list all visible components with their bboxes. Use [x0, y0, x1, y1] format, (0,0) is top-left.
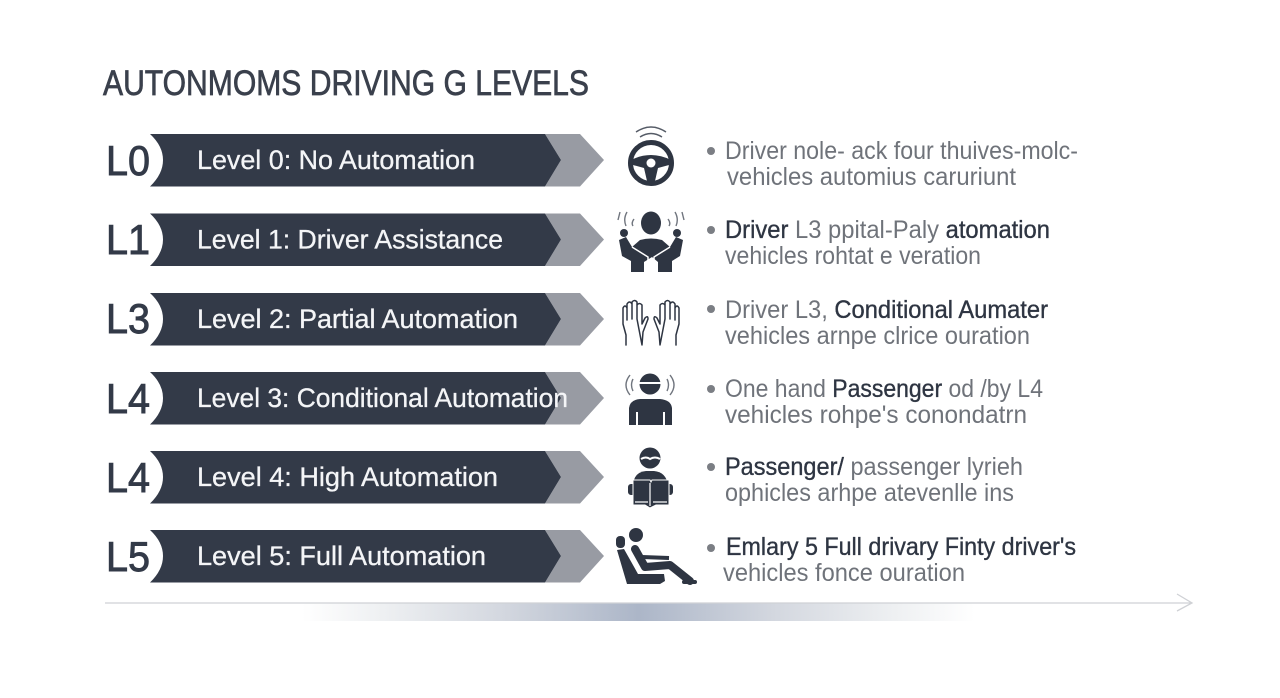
title: AUTONMOMS DRIVING G LEVELS: [103, 64, 589, 103]
level 2 arrow banner: [150, 293, 604, 346]
level 3 description: vehicles rohpe's conondatrn: [725, 401, 1027, 429]
level 4 arrow banner: Level 4: High Automation: [197, 462, 498, 492]
level 3 arrow banner: [150, 372, 604, 424]
level 4 description: [707, 453, 1023, 507]
progression arrow: [105, 594, 1192, 621]
level 4 arrow banner: [150, 451, 604, 504]
level 0 description: Driver nole- ack four thuives-molc-: [725, 137, 1078, 165]
level 3 description: One hand Passenger od /by L4: [725, 375, 1043, 403]
level 2 description: Driver L3, Conditional Aumater: [725, 296, 1048, 324]
row: level 4: [106, 448, 1023, 508]
level 5 description: vehicles fonce ouration: [723, 559, 965, 587]
level 5 badge: L5: [106, 533, 150, 580]
level 2 badge: L3: [106, 295, 150, 342]
row: level 5: [106, 528, 1076, 587]
level 4 badge: L4: [106, 454, 150, 501]
level 3 arrow banner: Level 3: Conditional Automation: [197, 383, 568, 413]
row: level 3: [106, 372, 1043, 429]
level 4 description: ophicles arhpe atevenlle ins: [725, 479, 1014, 507]
level 1 description: vehicles rohtat e veration: [725, 242, 981, 270]
level 5 description: [707, 533, 1076, 587]
level 5 arrow banner: Level 5: Full Automation: [197, 541, 486, 571]
icon: hands on wheel with head: [618, 212, 684, 272]
level 2 description: [707, 296, 1048, 350]
icon: steering wheel: [630, 127, 672, 184]
level 4 description: Passenger/ passenger lyrieh: [725, 453, 1023, 481]
level 0 arrow banner: Level 0: No Automation: [197, 145, 475, 175]
level 0 arrow banner: [150, 134, 604, 186]
row: level 0: [106, 127, 1078, 191]
level 5 description: Emlary 5 Full drivary Finty driver's: [726, 533, 1076, 561]
level 0 description: vehicles automius caruriunt: [727, 163, 1016, 191]
level 5 arrow banner: [150, 530, 604, 582]
level 0 description: [707, 137, 1078, 191]
row: level 1: [106, 212, 1050, 272]
level 2 description: vehicles arnpe clrice ouration: [725, 322, 1030, 350]
level 1 description: Driver L3 ppital-Paly atomation: [725, 216, 1050, 244]
level 1 arrow banner: Level 1: Driver Assistance: [197, 224, 503, 254]
icon: person with headset: [626, 374, 674, 425]
level 2 arrow banner: Level 2: Partial Automation: [197, 304, 518, 334]
level 0 badge: L0: [106, 137, 150, 184]
level 1 arrow banner: [150, 214, 604, 266]
level 1 description: [707, 216, 1050, 270]
level 3 badge: L4: [106, 375, 150, 422]
row: level 2: [106, 293, 1048, 350]
icon: hands off: [623, 300, 679, 345]
level 1 badge: L1: [106, 216, 150, 263]
icon: reclined passenger: [616, 528, 695, 584]
icon: passenger reading: [628, 448, 673, 508]
level 3 description: [707, 375, 1043, 429]
